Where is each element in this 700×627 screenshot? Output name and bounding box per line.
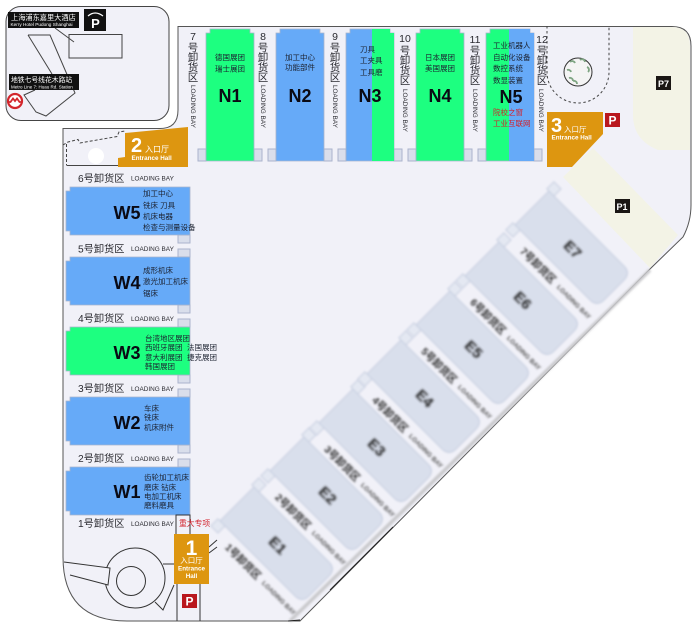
hall E7 bbox=[499, 182, 640, 323]
north hall N4: 日本展团 bbox=[425, 52, 455, 62]
west hall W2: 机床附件 bbox=[144, 422, 174, 432]
loading bay 3 label: 3号卸货区 bbox=[78, 382, 124, 395]
dashed plaza and tree circle bbox=[547, 26, 609, 103]
loading bay 5 label: 5号卸货区 bbox=[78, 242, 124, 256]
north hall N2: N2 bbox=[288, 86, 312, 106]
north hall N3: 工具磨 bbox=[360, 67, 383, 77]
north hall N5: 数控系统 bbox=[493, 63, 523, 73]
west hall W4: 激光加工机床 bbox=[143, 276, 188, 286]
entrance hall 2 bbox=[118, 127, 188, 167]
parking sign bbox=[84, 9, 106, 31]
hall E1 bbox=[204, 478, 345, 619]
entrance hall 3: 3 bbox=[551, 115, 562, 137]
entrance hall 2: 入口厅 bbox=[145, 145, 169, 154]
entrance hall 1: Entrance bbox=[178, 566, 205, 572]
hotel label bbox=[8, 12, 79, 28]
west hall W2 bbox=[66, 389, 190, 453]
entrance hall 3: Entrance Hall bbox=[552, 134, 592, 142]
loading bay 10 label bbox=[399, 33, 411, 133]
hall E5: E5 bbox=[461, 337, 486, 362]
parking area P7: P7 bbox=[658, 79, 669, 89]
loading bay 6 label: 6号卸货区 bbox=[78, 172, 124, 185]
hall E6: E6 bbox=[510, 288, 535, 313]
north hall N3 bbox=[338, 29, 402, 161]
west hall W2: 车床 bbox=[144, 403, 159, 413]
inset map: Kerry Hotel and metro station bbox=[6, 6, 169, 120]
hall E1: 1号卸货区 bbox=[222, 541, 264, 582]
west hall W1: 磨料磨具 bbox=[144, 500, 174, 510]
entrance hall 1: Hall bbox=[186, 573, 198, 580]
entrance hall 1 bbox=[174, 534, 209, 584]
hall E7: E7 bbox=[560, 237, 585, 262]
hall E5: LOADING BAY bbox=[456, 384, 493, 421]
west hall W3: 西班牙展团 bbox=[145, 342, 182, 352]
north hall N1: N1 bbox=[218, 86, 242, 106]
hall E7: LOADING BAY bbox=[555, 284, 592, 321]
loading bay 9 label: LOADING BAY bbox=[331, 85, 338, 129]
hall E6 bbox=[449, 233, 590, 374]
west hall W1 bbox=[66, 459, 190, 515]
hall E2 bbox=[254, 428, 395, 569]
north hall N3: N3 bbox=[358, 86, 382, 106]
metro label bbox=[9, 74, 79, 90]
entrance hall 2: 2 bbox=[131, 135, 142, 157]
loading bay 7 label: LOADING BAY bbox=[189, 85, 196, 129]
hall E3: E3 bbox=[364, 435, 389, 460]
west hall W5: W5 bbox=[114, 203, 140, 223]
west hall W2: 铣床 bbox=[144, 412, 159, 422]
loading bay 8 label: 8 bbox=[260, 31, 266, 43]
loading bay 11 label: 11 bbox=[470, 34, 481, 46]
loading bay 9 label bbox=[330, 31, 340, 129]
west hall W3: 意大利展团 bbox=[145, 352, 182, 362]
loading bay 6 label: LOADING BAY bbox=[131, 176, 175, 182]
hall E4: E4 bbox=[412, 386, 437, 412]
loading bay 1 label: 1号卸货区 bbox=[78, 517, 124, 530]
parking sign near entrance 1 bbox=[182, 594, 197, 608]
loading bay 3 label: LOADING BAY bbox=[131, 386, 175, 393]
north hall N1: 德国展团 bbox=[215, 52, 245, 62]
loading bay 4 label: LOADING BAY bbox=[131, 316, 175, 323]
west hall W4: 成形机床 bbox=[143, 265, 173, 275]
west hall W3: 法国展团 bbox=[187, 342, 217, 352]
west hall W4: W4 bbox=[114, 273, 140, 293]
west hall W3: 捷克展团 bbox=[187, 352, 217, 362]
loading bay 2 label: LOADING BAY bbox=[131, 456, 175, 463]
west hall W3: 台湾地区展团 bbox=[145, 333, 190, 343]
loading bay 1 label bbox=[78, 517, 175, 530]
hall E4 bbox=[351, 331, 492, 472]
west hall W1: 电加工机床 bbox=[144, 491, 182, 501]
parking sign: P bbox=[91, 16, 100, 31]
loading bay 7 label bbox=[188, 31, 198, 129]
loading bay 4 label bbox=[78, 312, 175, 325]
parking area P1 bbox=[563, 148, 678, 268]
loading bay 11 label bbox=[470, 34, 481, 133]
west hall W1: 磨床 钻床 bbox=[144, 482, 177, 492]
loading bay 7 label: 7 bbox=[190, 31, 196, 43]
north hall N5 bbox=[478, 29, 542, 161]
special projects label: 重大专项 bbox=[179, 518, 210, 528]
loading bay 4 label: 4号卸货区 bbox=[78, 312, 124, 325]
dashed area near entrance 2 bbox=[63, 131, 125, 166]
hall E5: 5号卸货区 bbox=[418, 345, 460, 386]
north hall N3: 刀具 bbox=[360, 45, 375, 54]
loading bay 11 label: 号卸货区 bbox=[470, 45, 480, 87]
north hall N4: N4 bbox=[428, 86, 452, 106]
hall E2: LOADING BAY bbox=[310, 530, 347, 567]
hotel label: 上海浦东嘉里大酒店 bbox=[11, 13, 76, 22]
loading bay 5 label bbox=[78, 242, 175, 256]
north hall N2 bbox=[268, 29, 332, 161]
parking sign near entrance 1: P bbox=[185, 594, 194, 608]
hall E3: 3号卸货区 bbox=[321, 443, 363, 484]
loading bay 6 label bbox=[78, 172, 175, 185]
loading bay 11 label: LOADING BAY bbox=[471, 89, 478, 133]
hall E2: E2 bbox=[315, 483, 340, 508]
hall E6: 6号卸货区 bbox=[467, 296, 509, 337]
west hall W3: W3 bbox=[114, 343, 140, 363]
loading bay 3 label bbox=[78, 382, 175, 395]
loading bay 12 label: 号卸货区 bbox=[537, 45, 547, 87]
west hall W3 bbox=[66, 319, 217, 383]
parking area P7 bbox=[633, 27, 690, 150]
loading bay 8 label: LOADING BAY bbox=[259, 85, 266, 129]
loading bay 12 label bbox=[536, 34, 548, 133]
roundabout and road lines bbox=[64, 515, 217, 621]
entrance hall 1: 1 bbox=[186, 537, 198, 560]
loading bay 2 label: 2号卸货区 bbox=[78, 452, 124, 465]
loading bay 2 label bbox=[78, 452, 175, 465]
entrance hall 2: Entrance Hall bbox=[132, 155, 172, 162]
west hall W1: W1 bbox=[114, 482, 140, 502]
north hall N5: N5 bbox=[499, 87, 523, 107]
loading bay 9 label: 号卸货区 bbox=[330, 42, 340, 84]
west hall W4: 锯床 bbox=[143, 288, 158, 298]
loading bay 9 label: 9 bbox=[332, 31, 338, 43]
loading bay 12 label: 12 bbox=[536, 34, 548, 46]
north hall N2: 加工中心 bbox=[285, 52, 315, 62]
loading bay 8 label bbox=[258, 31, 268, 129]
north hall N5: 院校之窗 bbox=[493, 107, 523, 117]
loading bay 10 label: 号卸货区 bbox=[400, 45, 410, 87]
west hall W4 bbox=[66, 249, 190, 313]
loading bay 8 label: 号卸货区 bbox=[258, 42, 268, 84]
east halls E1 to E7 (blurred) bbox=[204, 182, 650, 621]
west hall W2: W2 bbox=[114, 413, 140, 433]
west hall W5: 机床电器 bbox=[143, 211, 173, 221]
loading bay 12 label: LOADING BAY bbox=[537, 89, 544, 133]
north hall N1: 瑞士展团 bbox=[215, 64, 245, 74]
metro label: Metro Line 7: Huau Rd. Station bbox=[11, 84, 73, 90]
hall E1: E1 bbox=[265, 533, 290, 558]
west hall W5: 加工中心 bbox=[143, 188, 173, 198]
loading bay 7 label: 号卸货区 bbox=[188, 42, 198, 84]
hotel label: Kerry Hotel Pudong Shanghai bbox=[10, 22, 73, 27]
west hall W5: 检查与测量设备 bbox=[143, 222, 196, 232]
parking area P1: P1 bbox=[616, 202, 628, 212]
icon: metro logo bbox=[8, 94, 22, 108]
hall E4: LOADING BAY bbox=[407, 433, 444, 470]
hall E6: LOADING BAY bbox=[505, 335, 542, 372]
west hall W5: 铣床 刀具 bbox=[143, 200, 176, 210]
loading bay 10 label: LOADING BAY bbox=[401, 89, 408, 133]
parking sign near entrance 3: P bbox=[608, 114, 617, 128]
entrance hall 3: 入口厅 bbox=[564, 125, 587, 134]
loading bay 10 label: 10 bbox=[399, 33, 411, 45]
west hall W5 bbox=[66, 187, 196, 243]
north hall N4 bbox=[408, 29, 472, 161]
loading bay 1 label: LOADING BAY bbox=[131, 521, 175, 528]
north hall N1 bbox=[198, 29, 262, 161]
north hall N5: 工业互联网 bbox=[493, 118, 530, 128]
hall E3 bbox=[303, 380, 444, 521]
north hall N3: 工夹具 bbox=[360, 55, 383, 65]
north hall N5: 工业机器人 bbox=[493, 40, 531, 50]
hall E5 bbox=[400, 282, 541, 423]
hall E4: 4号卸货区 bbox=[369, 394, 411, 435]
north hall N2: 功能部件 bbox=[285, 62, 315, 72]
hall E2: 2号卸货区 bbox=[272, 491, 314, 532]
hall E7: 7号卸货区 bbox=[517, 245, 559, 286]
hall E1: LOADING BAY bbox=[260, 580, 297, 617]
west hall W3: 韩国展团 bbox=[145, 361, 175, 371]
metro label: 地铁七号线花木路站 bbox=[11, 75, 72, 84]
north hall N4: 美国展团 bbox=[425, 63, 455, 73]
hall E3: LOADING BAY bbox=[359, 482, 396, 519]
north hall N5: 数显装置 bbox=[493, 75, 523, 85]
west hall W1: 齿轮加工机床 bbox=[144, 472, 189, 482]
north hall N5: 自动化设备 bbox=[493, 52, 531, 62]
parking sign near entrance 3 bbox=[605, 113, 620, 128]
entrance hall 3 bbox=[547, 112, 603, 167]
loading bay 5 label: LOADING BAY bbox=[131, 246, 175, 253]
entrance hall 1: 入口厅 bbox=[180, 556, 203, 565]
